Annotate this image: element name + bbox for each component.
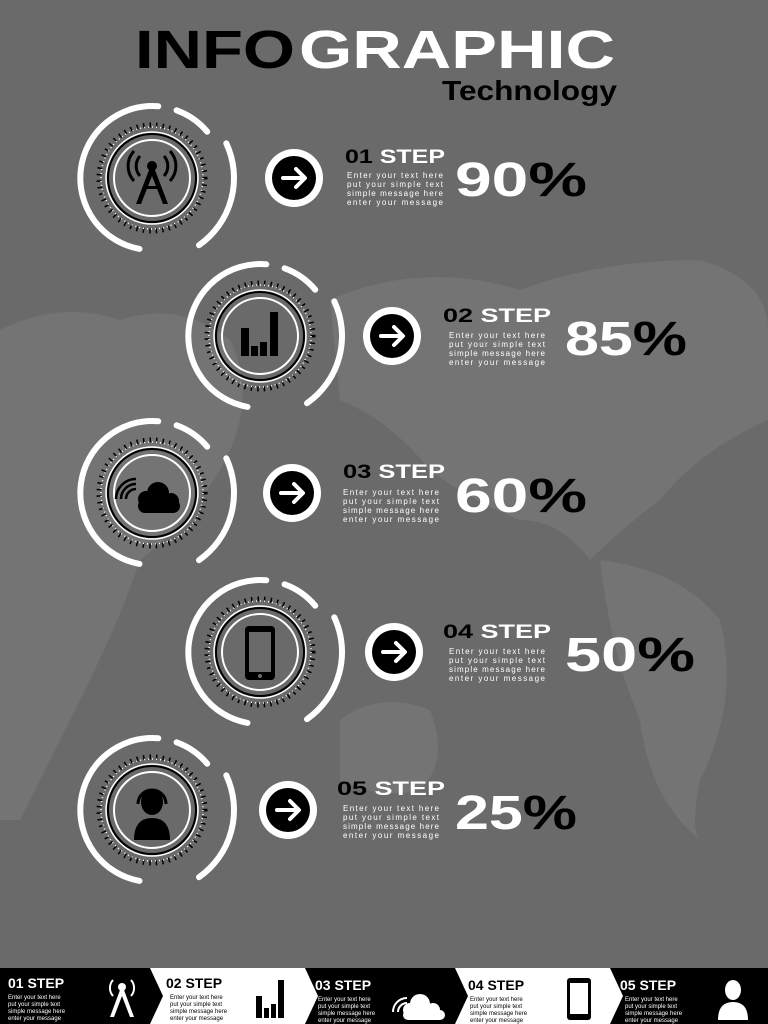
step 2: put your simple text — [449, 340, 546, 349]
step 4: simple message here — [449, 665, 546, 674]
bottom strip: Enter your text here — [625, 997, 678, 1003]
icon: phone ring — [188, 580, 342, 723]
step 4: enter your message — [449, 674, 546, 683]
step 4: 50 % — [565, 629, 695, 682]
step 2: simple message here — [449, 349, 546, 358]
step 2: 02 STEP — [443, 306, 551, 327]
bottom strip: enter your message — [470, 1018, 524, 1024]
step 4: put your simple text — [449, 656, 546, 665]
step 5: 25 % — [455, 787, 577, 840]
step text: 01 STEP — [345, 147, 445, 168]
bottom strip: 04 STEP — [468, 977, 524, 993]
step 3: Enter your text here — [343, 488, 440, 497]
step 4: Enter your text here — [449, 647, 546, 656]
step 3 — [80, 421, 587, 564]
step text: enter your message — [347, 198, 444, 207]
bottom strip: Enter your text here — [470, 997, 523, 1003]
step 5: put your simple text — [343, 813, 440, 822]
bottom strip: simple message here — [170, 1009, 228, 1015]
step 2: Enter your text here — [449, 331, 546, 340]
step text: put your simple text — [347, 180, 444, 189]
bottom strip: simple message here — [8, 1009, 66, 1015]
step 5: enter your message — [343, 831, 440, 840]
bottom strip: simple message here — [625, 1011, 683, 1017]
step text — [345, 147, 445, 207]
bottom strip: enter your message — [170, 1016, 224, 1022]
icon: cloud ring — [80, 421, 234, 564]
bottom strip: Enter your text here — [170, 995, 223, 1001]
bottom strip: enter your message — [8, 1016, 62, 1022]
title: INFO — [135, 20, 295, 80]
arrow — [265, 149, 323, 207]
step 4: 04 STEP — [443, 622, 551, 643]
bottom strip: 03 STEP — [315, 977, 371, 993]
bottom strip: enter your message — [625, 1018, 679, 1024]
icon: support person ring — [80, 738, 234, 881]
step 3: enter your message — [343, 515, 440, 524]
bottom strip: 02 STEP — [166, 975, 222, 991]
bottom strip: simple message here — [318, 1011, 376, 1017]
step 4 — [188, 580, 695, 723]
bottom strip: put your simple text — [170, 1002, 222, 1008]
title: Technology — [442, 75, 617, 106]
title — [135, 20, 617, 106]
step 3: put your simple text — [343, 497, 440, 506]
bottom strip: enter your message — [318, 1018, 372, 1024]
step 2: 85 % — [565, 313, 687, 366]
step 2: enter your message — [449, 358, 546, 367]
step 5 — [80, 738, 577, 881]
bottom strip — [0, 968, 768, 1024]
step text: simple message here — [347, 189, 444, 198]
step 1 — [80, 106, 587, 249]
step 5: Enter your text here — [343, 804, 440, 813]
title: GRAPHIC — [299, 20, 615, 80]
strip icons — [110, 980, 134, 1017]
bottom strip: put your simple text — [625, 1004, 677, 1010]
step 5: simple message here — [343, 822, 440, 831]
bottom strip: Enter your text here — [318, 997, 371, 1003]
bottom strip: put your simple text — [318, 1004, 370, 1010]
bottom strip: put your simple text — [470, 1004, 522, 1010]
bottom strip: 01 STEP — [8, 975, 64, 991]
world map (approximate) — [0, 260, 768, 840]
percent: 90 % — [455, 154, 587, 207]
step 2 — [188, 264, 687, 407]
bottom strip: put your simple text — [8, 1002, 60, 1008]
step text: Enter your text here — [347, 171, 444, 180]
icon: bars ring — [188, 264, 342, 407]
step 3: 60 % — [455, 470, 587, 523]
step 3: 03 STEP — [343, 462, 445, 483]
bottom strip: simple message here — [470, 1011, 528, 1017]
step 3: simple message here — [343, 506, 440, 515]
step 5: 05 STEP — [337, 779, 445, 800]
icon: tower ring — [80, 106, 234, 249]
bottom strip: 05 STEP — [620, 977, 676, 993]
bottom strip: Enter your text here — [8, 995, 61, 1001]
